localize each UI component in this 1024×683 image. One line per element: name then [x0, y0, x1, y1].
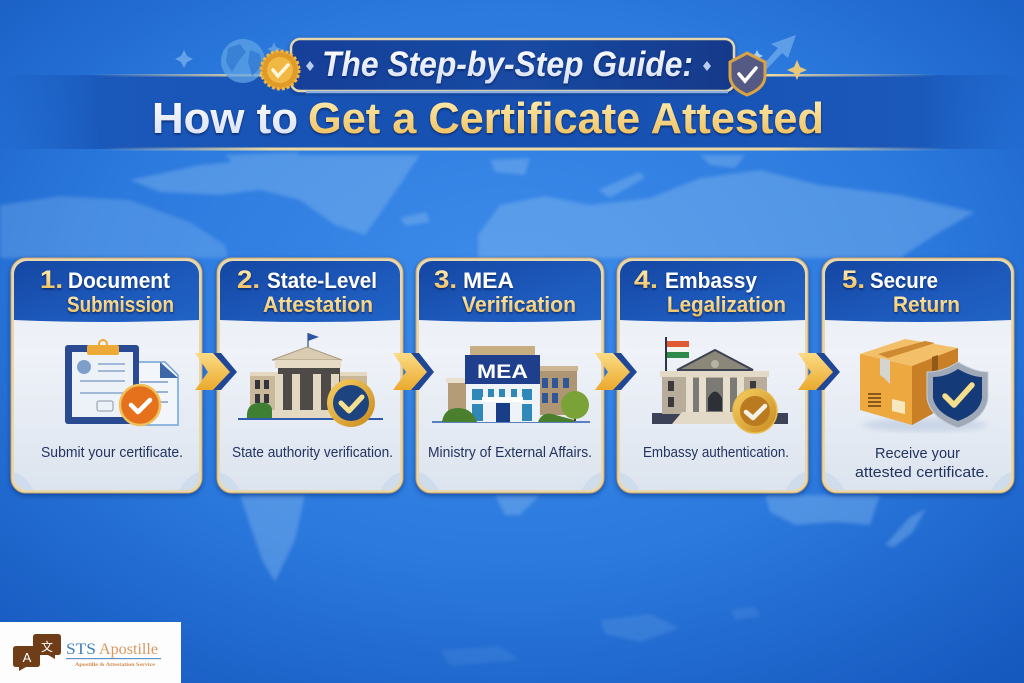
heading: Legalization: [667, 292, 786, 317]
panel: step 3: [416, 258, 604, 493]
icon: translation bubbles: [13, 634, 61, 671]
icon: clipboard and certificate: [65, 340, 178, 425]
icon: MEA building: [432, 346, 590, 422]
heading: Embassy: [665, 268, 758, 293]
heading: Verification: [462, 292, 576, 317]
wordmark: STS: [66, 641, 96, 658]
world map: [0, 152, 975, 666]
description: [855, 445, 989, 481]
arrow 2: [393, 353, 434, 390]
title band: [0, 74, 1024, 150]
heading: 4.: [634, 266, 658, 294]
logo: STS Apostille: Apostille & Attestation Service: [75, 663, 156, 668]
decoration: globe and sparkles: [175, 39, 281, 83]
arrow 4: [798, 353, 840, 390]
description: Submit your certificate.: [41, 444, 183, 461]
logo: STS Apostille: [0, 622, 181, 683]
icon: translation bubbles: A: [23, 650, 32, 665]
heading: Secure: [870, 268, 938, 293]
heading: [237, 266, 377, 317]
main title: Get a Certificate Attested: [308, 94, 824, 143]
heading: 2.: [237, 266, 260, 294]
arrow 3: [595, 353, 637, 390]
heading: Document: [68, 268, 171, 293]
panel: step 2: [217, 258, 403, 493]
icon: embassy with flag: [652, 337, 788, 433]
heading: [842, 266, 960, 317]
description: attested certificate.: [855, 464, 989, 481]
icon: translation bubbles: 文: [41, 639, 53, 654]
panel: step 4: [617, 258, 808, 493]
banner diamonds: [306, 61, 711, 71]
heading: [634, 266, 786, 317]
decoration: paper plane arrow and sparkles: [751, 35, 807, 80]
icon: gold seal: [261, 51, 299, 89]
heading: State-Level: [267, 268, 377, 293]
heading: [434, 266, 576, 317]
main title: How to: [152, 94, 298, 143]
title banner: [291, 39, 734, 92]
panel: step 1: [11, 258, 202, 493]
description: Embassy authentication.: [643, 444, 789, 461]
logo: STS Apostille: Apostille: [99, 641, 158, 658]
heading: [40, 266, 174, 317]
description: Ministry of External Affairs.: [428, 444, 592, 461]
icon: parcel and shield: [860, 339, 988, 432]
heading: 1.: [40, 266, 63, 294]
icon: shield badge: [730, 53, 765, 95]
heading: 5.: [842, 266, 865, 294]
heading: Attestation: [263, 292, 373, 317]
subtitle: The Step-by-Step Guide:: [322, 45, 693, 84]
panel: step 5: [822, 258, 1014, 493]
description: State authority verification.: [232, 444, 393, 461]
heading: Return: [893, 292, 960, 317]
heading: 3.: [434, 266, 457, 294]
arrow 1: [195, 353, 237, 390]
heading: MEA: [463, 268, 514, 293]
description: Receive your: [875, 445, 960, 462]
icon: MEA building: MEA: [477, 362, 528, 383]
heading: Submission: [67, 292, 174, 317]
icon: state building: [238, 333, 383, 427]
